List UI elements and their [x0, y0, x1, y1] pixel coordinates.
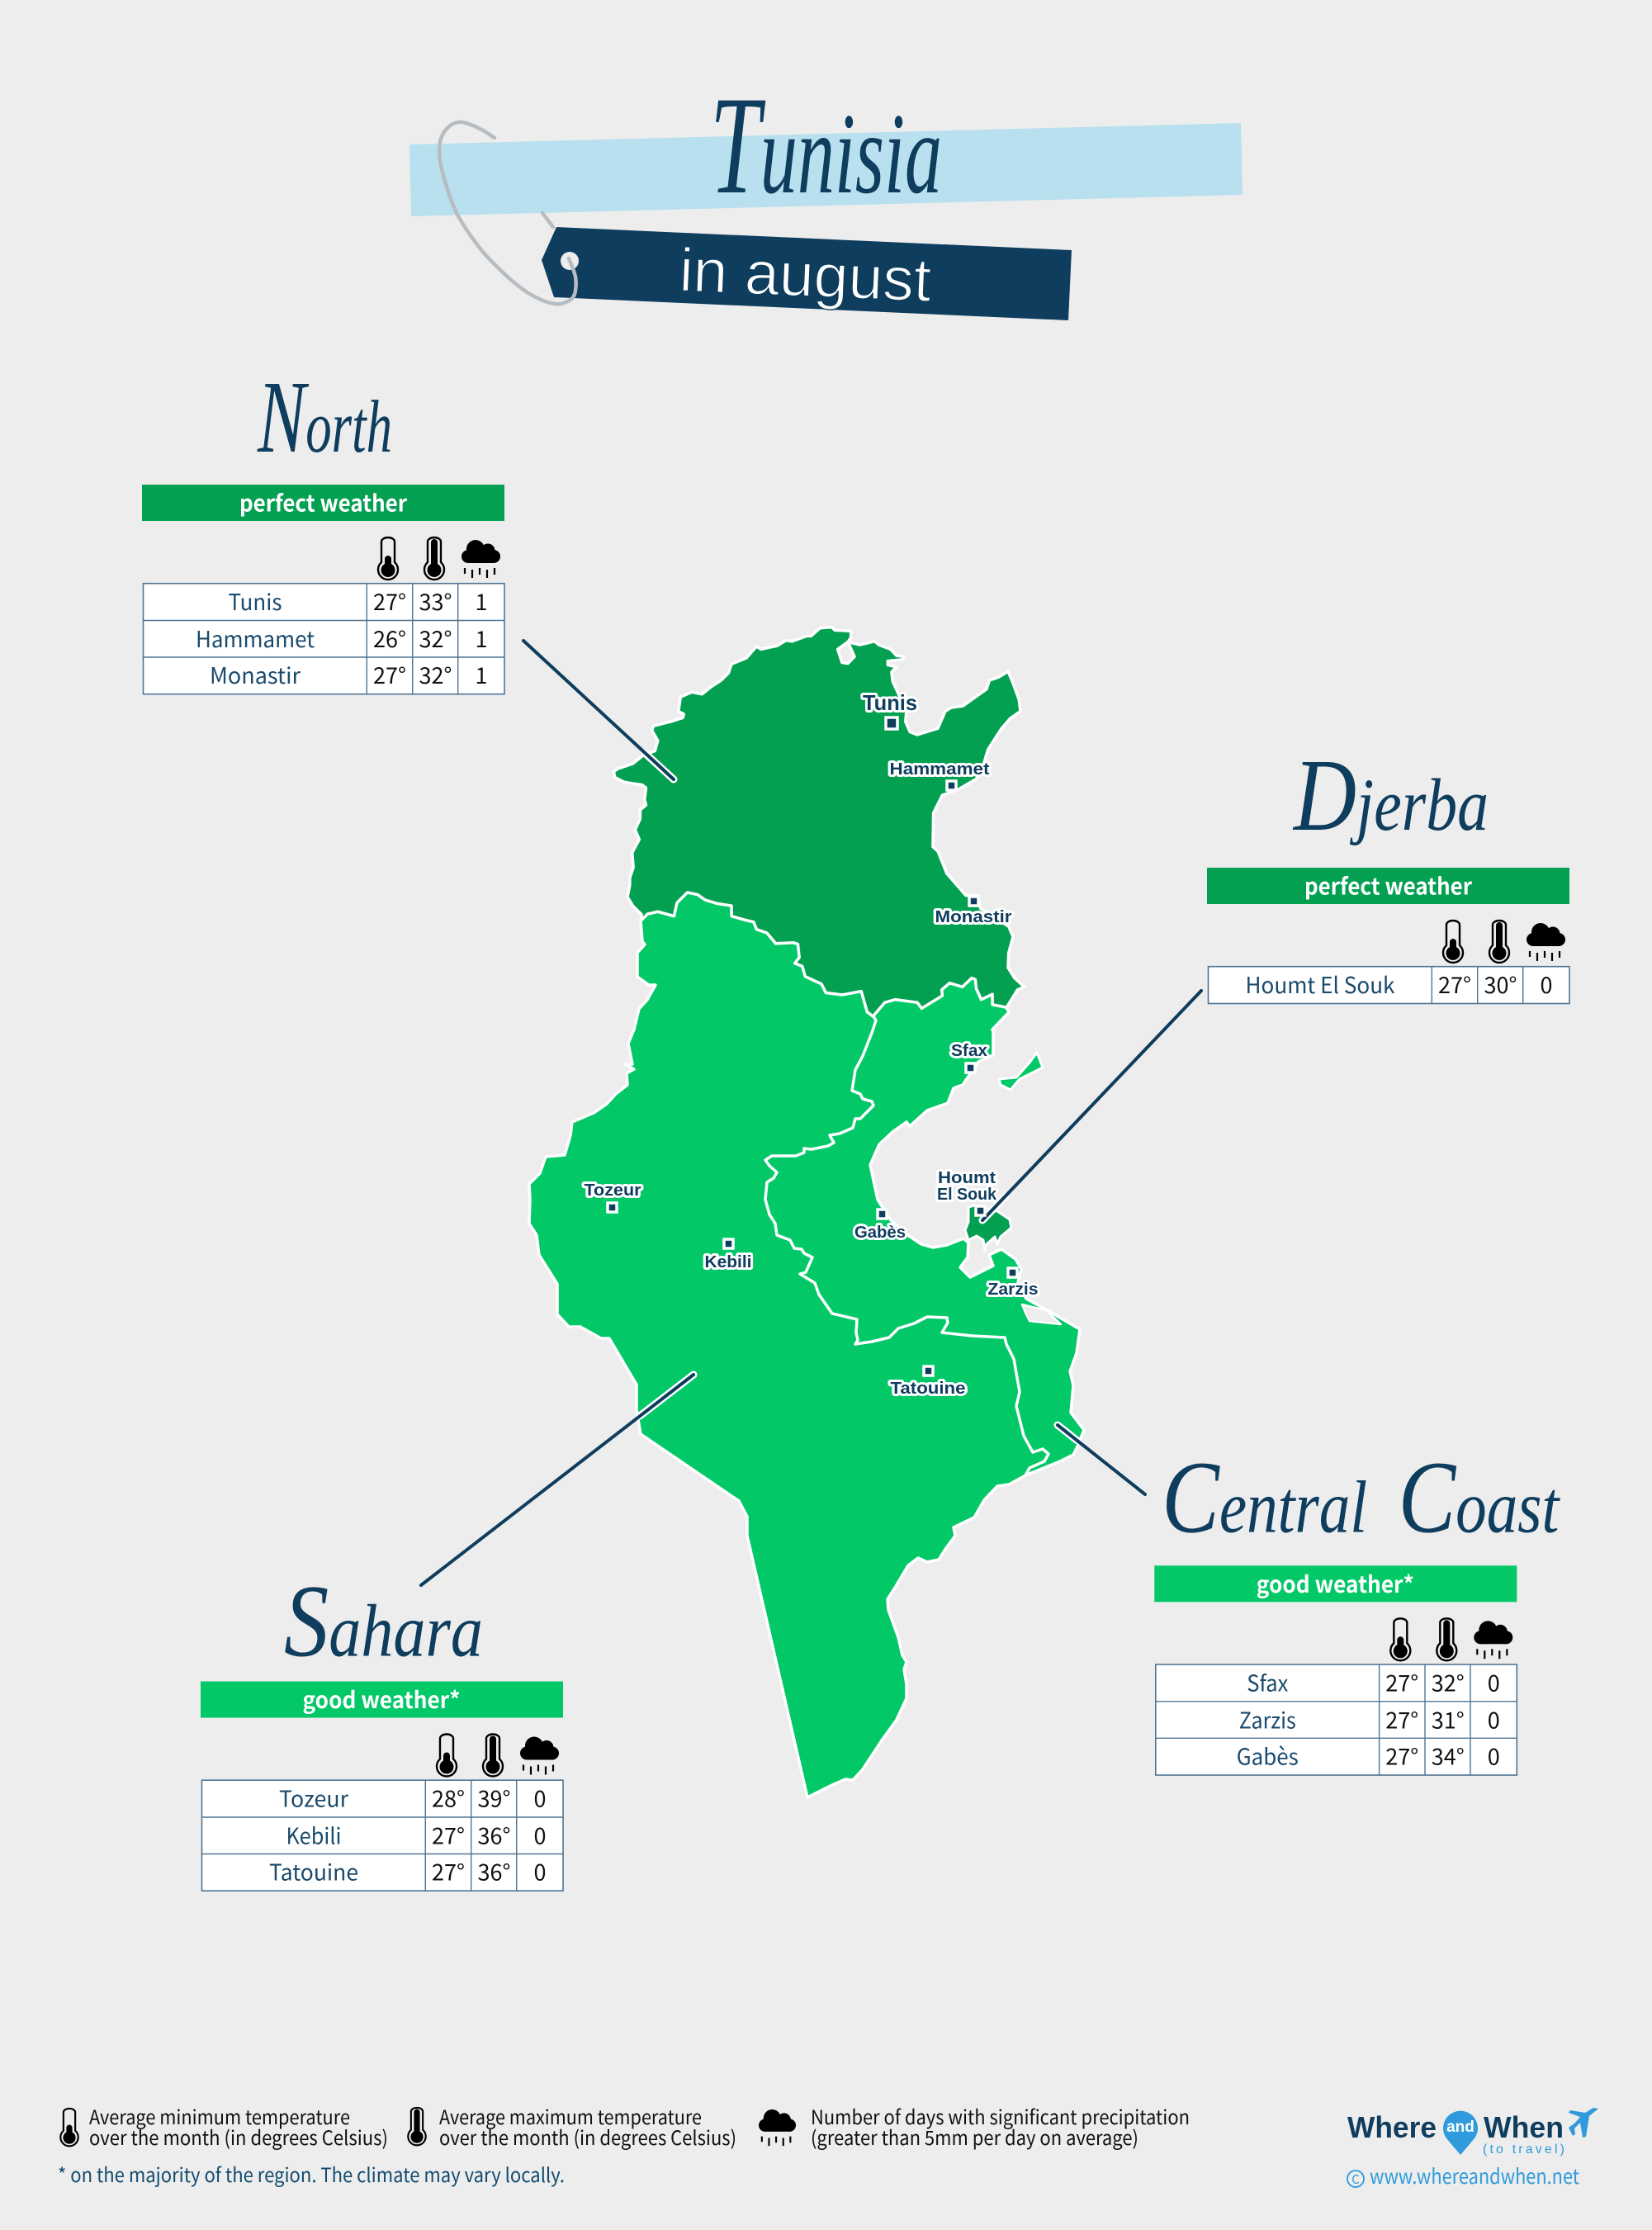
legend text: maximum temperature: Average maximum temperature: [439, 2101, 702, 2130]
city: Monastir: [935, 897, 1012, 926]
icon: maximum temperature: [424, 537, 444, 580]
city: Monastir: Monastir: [935, 908, 1012, 926]
icon: minimum temperature: [1443, 921, 1463, 963]
legend: [58, 2101, 1190, 2188]
city markers and labels: [585, 690, 1039, 1398]
rating text: good weather*: [302, 1683, 461, 1716]
city: Hammamet: Hammamet: [890, 760, 990, 779]
heading: Djerba: Djerba: [1292, 739, 1489, 853]
weather table: 0: [1488, 1665, 1500, 1697]
map: Sahara / Central Coast boundary: [765, 1016, 1048, 1475]
weather table: 39°: [477, 1782, 510, 1813]
tag hole: [561, 252, 579, 270]
logo word: and: and: [1446, 2119, 1474, 2136]
city: Zarzis: Zarzis: [987, 1281, 1039, 1299]
icon: rain: [462, 540, 500, 578]
weather table: 30°: [1484, 968, 1517, 1000]
rating bar: [1207, 868, 1569, 904]
icon: rain: [520, 1737, 559, 1775]
weather table: 27°: [373, 658, 406, 690]
tag string: [439, 122, 576, 304]
leader: Djerba: [982, 991, 1201, 1220]
weather table: Monastir: [210, 658, 301, 690]
weather table: Tunis: [228, 585, 282, 617]
weather table: 28°: [432, 1782, 465, 1813]
weather table: Houmt El Souk: [1245, 968, 1395, 1000]
weather table: 0: [533, 1782, 547, 1813]
icon: maximum temperature: [1437, 1618, 1456, 1660]
weather table: 36°: [477, 1854, 510, 1887]
title block: [409, 68, 1243, 320]
subtitle: in august: in august: [678, 235, 933, 315]
weather table: 32°: [419, 622, 452, 654]
map: Sahara and Central Coast regions: [529, 826, 1084, 1797]
weather table: Zarzis: [1239, 1702, 1296, 1735]
icon: minimum temperature: [1390, 1618, 1410, 1660]
weather table: [201, 1780, 563, 1891]
weather table: 1: [476, 585, 487, 617]
rating bar: [201, 1681, 563, 1717]
map: Djerba island: [965, 1205, 1011, 1251]
heading: Sahara: Sahara: [284, 1565, 483, 1679]
rating bar: [142, 485, 504, 521]
city: Tunis: Tunis: [863, 690, 917, 715]
weather table: Sfax: [1247, 1665, 1289, 1697]
weather table: 32°: [419, 658, 452, 690]
weather table: 34°: [1432, 1739, 1465, 1771]
weather table: 0: [1488, 1739, 1500, 1771]
leader: Sahara: [421, 1375, 693, 1585]
leader casings: [640, 753, 1077, 1441]
leader: Central Coast: [1058, 1425, 1145, 1494]
rating text: good weather*: [1257, 1567, 1414, 1600]
map: North region: [613, 627, 1025, 1016]
rating text: perfect weather: [1304, 869, 1473, 902]
city: Hammamet: [890, 760, 990, 790]
weather table: 0: [533, 1854, 547, 1887]
panel: North: [142, 361, 504, 694]
map: Kerkennah islands: [999, 1053, 1043, 1090]
icon: maximum temperature: [1489, 921, 1509, 963]
icon: rain: [1474, 1621, 1512, 1659]
heading: Central Coast: Central Coast: [1162, 1441, 1560, 1555]
weather table: 0: [1541, 968, 1552, 1000]
weather table: 27°: [1385, 1739, 1418, 1771]
weather table: 32°: [1432, 1665, 1465, 1697]
city: Houmt El Souk: [937, 1169, 997, 1215]
icon: rain: [1527, 923, 1565, 961]
city: Kebili: [705, 1239, 751, 1271]
weather table: Tatouine: [269, 1854, 358, 1887]
icon: minimum temperature: [437, 1734, 457, 1776]
weather table: 36°: [477, 1818, 510, 1851]
icon: minimum temperature: [378, 537, 398, 580]
legend text: minimum temperature: over the month (in degrees Celsius): [89, 2122, 388, 2151]
copyright mark: C: [1351, 2171, 1360, 2188]
city: Zarzis: [987, 1268, 1039, 1299]
legend text: maximum temperature: over the month (in degrees Celsius): [439, 2122, 736, 2151]
legend text: minimum temperature: Average minimum temperature: [89, 2101, 350, 2130]
city: Tozeur: [585, 1181, 641, 1212]
weather table: 27°: [1385, 1665, 1418, 1697]
title band: [409, 123, 1243, 216]
weather table: 27°: [1385, 1702, 1418, 1735]
city: Kebili: Kebili: [705, 1253, 751, 1271]
logo word: Where: Where: [1347, 2110, 1437, 2144]
rating bar: [1154, 1565, 1517, 1602]
leader: North: [523, 641, 674, 779]
logo word: When: When: [1484, 2110, 1564, 2144]
subtitle tag: [542, 227, 1072, 320]
logo pin: [1443, 2111, 1478, 2155]
weather table: Tozeur: [279, 1782, 349, 1813]
weather table: 27°: [1438, 968, 1471, 1000]
logo tagline: (to travel): [1483, 2142, 1564, 2157]
city: Tozeur: Tozeur: [585, 1181, 641, 1200]
weather table: 27°: [432, 1854, 465, 1887]
city: Gabes: Gabès: [854, 1224, 906, 1242]
website: www.whereandwhen.net: [1370, 2161, 1579, 2190]
city: Tunis: [863, 690, 917, 729]
rating text: perfect weather: [239, 485, 408, 518]
heading: North: North: [257, 361, 392, 475]
city: Tatouine: [890, 1366, 966, 1398]
weather table: Kebili: [286, 1818, 342, 1851]
legend icon: rain: [759, 2109, 796, 2146]
weather table: 0: [1488, 1702, 1500, 1735]
weather table: 0: [533, 1818, 547, 1851]
weather table: 1: [476, 622, 487, 654]
weather table: Hammamet: [196, 622, 315, 654]
copyright mark: [1347, 2171, 1364, 2188]
leader lines: [421, 641, 1201, 1585]
city: Gabes: [854, 1210, 906, 1242]
legend icon: minimum temperature: [60, 2109, 78, 2146]
legend text: rain: Number of days with significant precipitation: [811, 2101, 1190, 2130]
weather table: [1156, 1664, 1517, 1775]
weather table: 27°: [432, 1818, 465, 1851]
icon: maximum temperature: [483, 1734, 503, 1776]
city: Houmt El Souk: El Souk: [937, 1186, 997, 1204]
logo plane: [1569, 2108, 1598, 2138]
legend text: rain: (greater than 5mm per day on average): [811, 2122, 1138, 2151]
city: Sfax: Sfax: [951, 1042, 987, 1060]
weather table: 33°: [419, 585, 452, 617]
logo: [1347, 2108, 1598, 2190]
weather table: Gabès: [1237, 1739, 1299, 1771]
weather table: 31°: [1432, 1702, 1465, 1735]
title: Tunisia: Tunisia: [710, 68, 942, 223]
footnote: * on the majority of the region. The climate may vary locally.: [58, 2159, 565, 2188]
weather table: [144, 584, 504, 694]
map of Tunisia: [529, 627, 1084, 1797]
panel: Central Coast: [1154, 1441, 1560, 1775]
weather table: 1: [476, 658, 487, 690]
panel: Sahara: [201, 1565, 563, 1891]
panel: Djerba: [1207, 739, 1569, 1004]
city: Houmt El Souk: Houmt: [938, 1169, 996, 1187]
weather table: 26°: [373, 622, 406, 654]
map: lagoon: [1022, 1304, 1061, 1324]
city: Tatouine: Tatouine: [890, 1380, 966, 1398]
legend icon: maximum temperature: [408, 2108, 426, 2145]
city: Sfax: [951, 1042, 987, 1072]
weather table: 27°: [373, 585, 406, 617]
weather table: [1209, 967, 1569, 1004]
